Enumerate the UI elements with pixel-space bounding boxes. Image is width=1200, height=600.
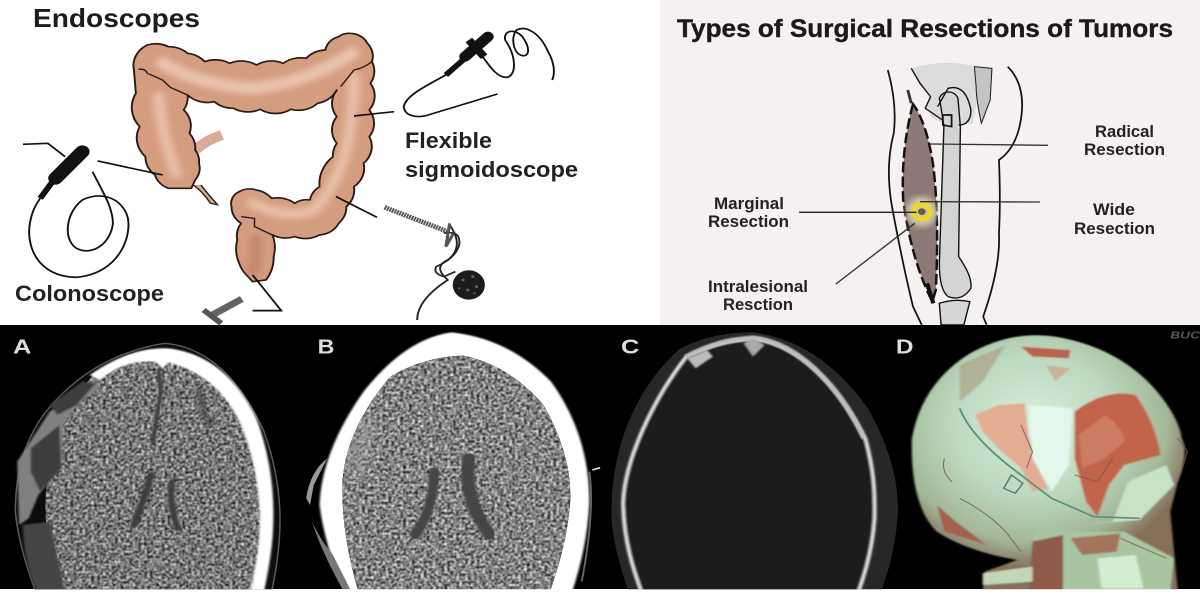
label: marginal resection: Marginal xyxy=(714,195,784,213)
leader: wide xyxy=(920,201,1040,203)
letter B: B xyxy=(318,336,334,358)
letter A: A xyxy=(13,336,31,358)
letter C: C xyxy=(621,336,639,358)
label: flexible sigmoidoscope: Flexible xyxy=(405,128,492,153)
heading: types of surgical resections: Types of Surgical Resections of Tumors xyxy=(677,15,1173,43)
label: radical resection: Resection xyxy=(1084,141,1165,159)
connector: colonoscope to cecum xyxy=(98,161,163,175)
label: flexible sigmoidoscope xyxy=(405,128,578,182)
colon fold lines xyxy=(139,62,372,235)
femur xyxy=(939,92,971,298)
appendix xyxy=(193,185,217,205)
colon highlights xyxy=(159,53,354,270)
skull cracks xyxy=(943,425,1187,558)
hip socket lines xyxy=(938,88,971,125)
icon: snare and polyp xyxy=(336,197,485,320)
CT scan B xyxy=(306,332,600,600)
extracranial collection xyxy=(17,382,101,592)
ventricles B xyxy=(415,458,490,535)
muscle with dashed radical margin xyxy=(903,104,937,302)
pelvis xyxy=(911,63,980,125)
leg outline xyxy=(888,70,922,325)
icon: rigid scope xyxy=(204,275,281,323)
label: wide resection: Wide xyxy=(1093,201,1135,219)
skull bone A xyxy=(90,348,273,600)
icon: flexible sigmoidoscope xyxy=(354,29,554,117)
3D skull D xyxy=(896,330,1200,592)
ileum stub xyxy=(195,135,222,150)
surgical incision line xyxy=(960,408,1140,518)
panel: types of surgical resections xyxy=(660,0,1200,325)
label: colonoscope: Colonoscope xyxy=(15,281,164,306)
panel: endoscopes diagram xyxy=(0,0,660,325)
label: radical resection: Radical xyxy=(1095,123,1154,141)
icon: colonoscope xyxy=(23,143,163,277)
label: intralesional resection: Resction xyxy=(723,296,793,314)
connector: sigmoidoscope to colon xyxy=(354,112,394,116)
leader: marginal xyxy=(799,212,917,213)
leg anatomy diagram xyxy=(799,63,1048,325)
ventricles A xyxy=(134,370,209,528)
label: marginal resection: Resection xyxy=(708,213,789,231)
colon body xyxy=(132,33,375,282)
heading: endoscopes: Endoscopes xyxy=(33,3,200,33)
connector: snare to colon xyxy=(336,197,377,217)
label: marginal resection xyxy=(708,195,789,231)
label: radical resection xyxy=(1084,123,1165,159)
watermark: BUC xyxy=(1170,330,1200,341)
leader: intralesional xyxy=(836,223,915,284)
CT scan C xyxy=(611,332,898,600)
label: wide resection xyxy=(1074,201,1155,238)
tibia xyxy=(939,300,970,325)
label: intralesional resection xyxy=(708,278,808,314)
letter D: D xyxy=(896,336,913,358)
label: intralesional resection: Intralesional xyxy=(708,278,808,296)
tumor: yellow ring xyxy=(906,197,938,227)
CT scan A xyxy=(13,336,280,600)
panel: CT scan strip xyxy=(0,325,1200,600)
label: flexible sigmoidoscope: sigmoidoscope xyxy=(405,157,578,182)
label: wide resection: Resection xyxy=(1074,220,1155,238)
connector: rigid scope to rectum xyxy=(253,275,281,311)
leader: radical xyxy=(931,144,1048,145)
frontal bone thickening xyxy=(686,338,864,438)
colon illustration xyxy=(132,33,375,282)
